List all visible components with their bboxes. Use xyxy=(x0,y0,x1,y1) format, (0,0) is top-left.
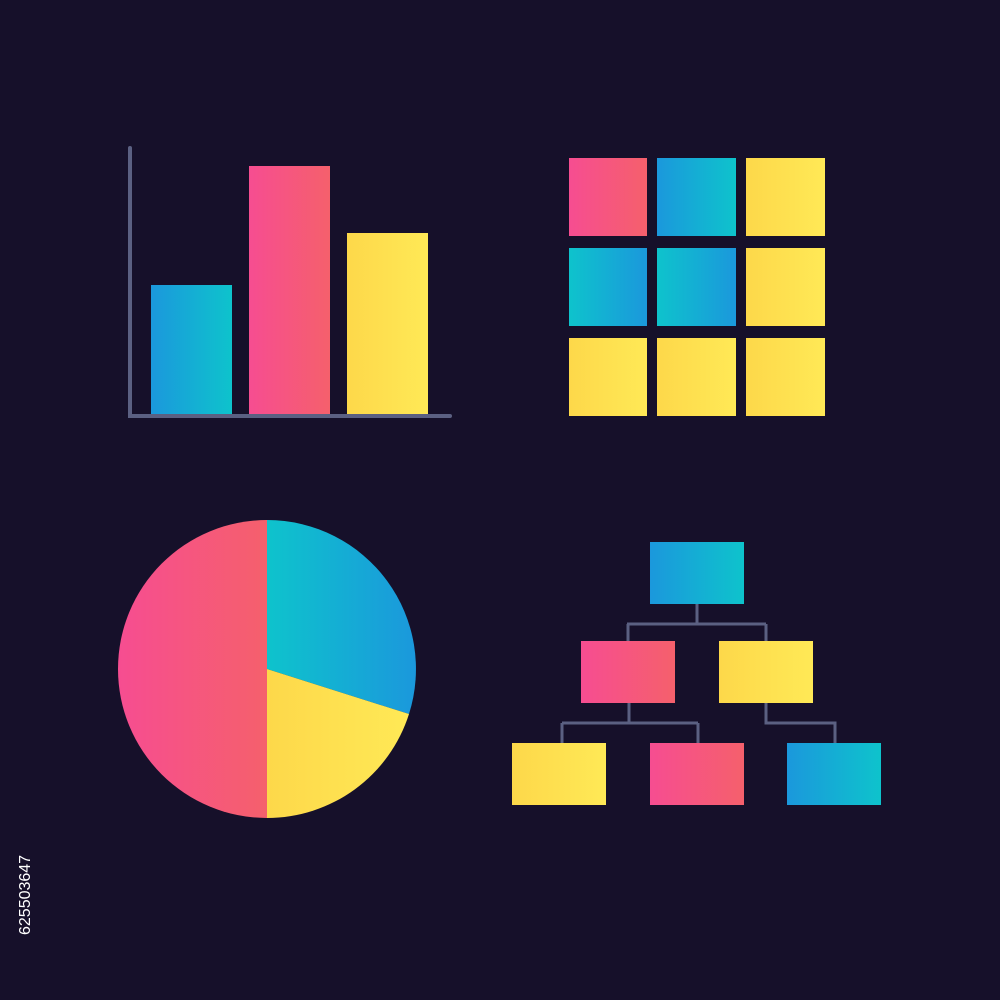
box: bottom right xyxy=(787,743,881,805)
slice: teal xyxy=(267,520,416,714)
slice: yellow xyxy=(267,669,409,818)
stock id text: 625503647 xyxy=(17,855,34,935)
box: top xyxy=(650,542,744,604)
bar chart xyxy=(130,148,450,416)
box: bottom left xyxy=(512,743,606,805)
connectors xyxy=(562,604,835,743)
pie chart xyxy=(118,520,416,818)
hierarchy diagram xyxy=(512,542,881,805)
grid of squares xyxy=(569,158,825,416)
axes xyxy=(130,148,450,416)
bar: yellow xyxy=(347,233,428,414)
bar: blue xyxy=(151,285,232,414)
slice: pink half xyxy=(118,520,267,818)
box: mid right xyxy=(719,641,813,703)
box: mid left xyxy=(581,641,675,703)
bar: pink xyxy=(249,166,330,414)
box: bottom mid xyxy=(650,743,744,805)
